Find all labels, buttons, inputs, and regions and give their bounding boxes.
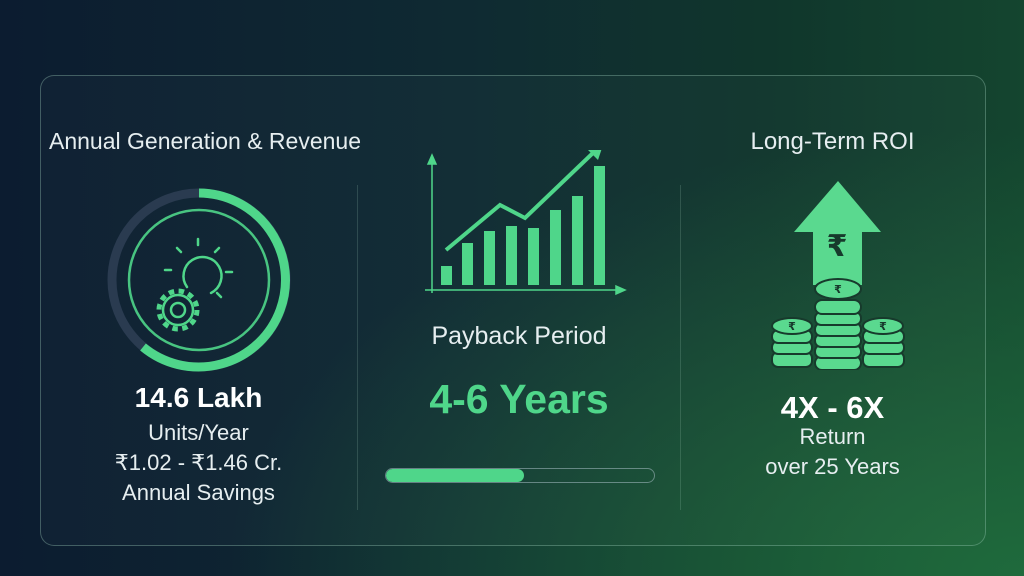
- panel: annual generation: Units/Year: [148, 420, 249, 445]
- panel: long-term roi: over 25 Years: [765, 454, 900, 479]
- main panel: [40, 75, 986, 546]
- label: payback period: Payback Period: [431, 322, 607, 350]
- icon: arrow with coins: [771, 181, 905, 370]
- panel: annual generation: ₹1.02 - ₹1.46 Cr.: [115, 450, 282, 475]
- panel: annual generation: Annual Savings: [122, 480, 275, 505]
- stat: return: 4X - 6X: [781, 390, 884, 425]
- panel: annual generation: [49, 128, 361, 505]
- icon: arrow with coins: ₹: [879, 320, 887, 333]
- heading: annual generation: Annual Generation & Revenue: [49, 128, 361, 154]
- panel: long-term roi: [750, 128, 915, 479]
- stat: years: 4-6 Years: [429, 376, 609, 422]
- stat: units: 14.6 Lakh: [135, 382, 262, 413]
- icon: arrow with coins: ₹: [834, 283, 842, 296]
- panel: payback: [385, 150, 655, 483]
- icon: arrow with coins: ₹: [827, 230, 847, 263]
- chart: bar growth: [425, 150, 627, 296]
- panel: long-term roi: Return: [799, 424, 866, 449]
- heading: roi: Long-Term ROI: [750, 128, 915, 155]
- icon: arrow with coins: ₹: [788, 320, 796, 333]
- progress bar: [385, 468, 655, 483]
- icon: ring gauge with sun and gear: [108, 188, 290, 372]
